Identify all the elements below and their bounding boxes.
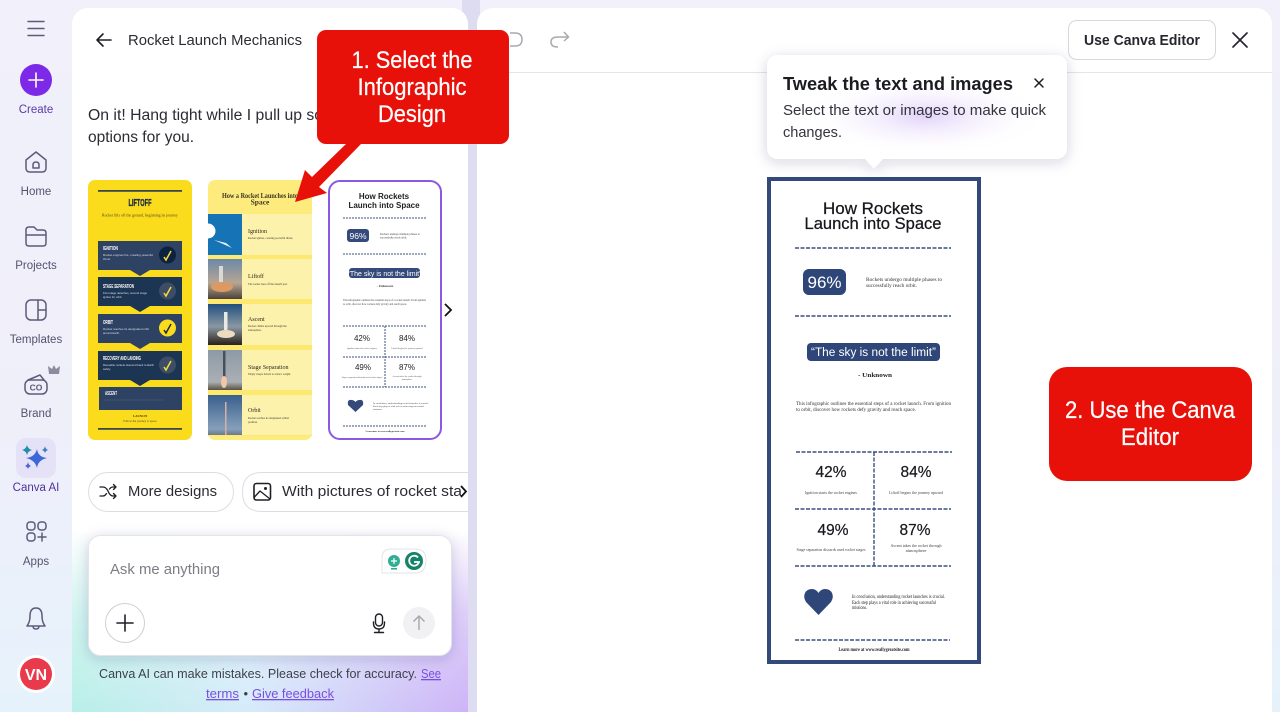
grammarly badge [382, 549, 426, 573]
quote: - Unknown [858, 372, 892, 379]
tooltip: tweak the text and images [767, 55, 1067, 168]
step: stage separation: ignites for orbit. [103, 295, 122, 299]
assistant message [88, 107, 345, 146]
design thumbnail: how rockets launch (selected): Stage separation discards used rocket stages [342, 376, 382, 379]
icon: redo [551, 32, 568, 47]
stat: 84%: Liftoff begins the journey upward [889, 490, 944, 495]
tooltip: tweak the text and images: Select the text or images to make quick [783, 103, 1047, 119]
step: recovery and landing: RECOVERY AND LANDING [103, 356, 141, 362]
callout: use the canva editor: 2. Use the Canva [1065, 397, 1236, 424]
stat: 87%: Ascent takes the rocket through [890, 543, 942, 548]
callout: select the infographic design: Infographic [358, 74, 466, 101]
chip: with pictures of rocket stages [242, 472, 468, 512]
stat: 49% [796, 522, 866, 552]
assistant message: On it! Hang tight while I pull up some [88, 107, 345, 124]
disclaimer text: terms [206, 686, 240, 701]
row: orbit: Rocket reaches its designated orbital [248, 417, 289, 420]
stat: 96%: Rockets undergo multiple phases to [866, 277, 942, 283]
row: liftoff [208, 259, 312, 299]
design thumbnail: how rockets launch (selected): atmosphere [402, 379, 412, 381]
nav item: home [21, 152, 51, 198]
stat: 42% [805, 464, 857, 495]
design thumbnail: how rockets launch (selected): Ignition starts the rocket engines [347, 347, 377, 350]
intro paragraph [796, 400, 951, 413]
design thumbnail: how rockets launch (selected): Rockets undergo multiple phases to [380, 233, 420, 236]
disclaimer text: See [421, 666, 441, 681]
step: stage separation: First stage detaches, second stage [103, 291, 147, 295]
design thumbnail: how rockets launch (selected): How Rockets [359, 192, 410, 201]
nav item: apps: Apps [23, 556, 49, 568]
stat: 87%: atmosphere [906, 548, 926, 553]
step: recovery and landing: safely. [103, 367, 111, 371]
chat input box: Ask me anything [110, 561, 220, 578]
step: stage separation: STAGE SEPARATION [103, 284, 134, 290]
stat: 42%: Ignition starts the rocket engines [805, 490, 857, 495]
conclusion text [852, 594, 945, 611]
icon: carousel next arrow [445, 304, 451, 316]
stat: 49%: 49% [818, 522, 848, 539]
design thumbnail: how rockets launch (selected): missions. [373, 408, 383, 411]
tooltip: tweak the text and images: changes. [783, 125, 842, 141]
quote: “The sky is not the limit” [811, 347, 936, 359]
icon: microphone [374, 614, 384, 632]
chat header: Rocket Launch Mechanics [128, 32, 302, 49]
row: ascent [208, 304, 312, 345]
design thumbnail: how rockets launch (selected): Each step plays a vital role in achieving successful [373, 405, 424, 408]
stat: 96%: 96% [807, 273, 842, 292]
stat: 87% [890, 522, 942, 553]
nav item: brand [21, 365, 60, 420]
row: ignition [200, 214, 312, 255]
row: ascent: atmosphere. [248, 329, 262, 332]
stat: 49%: Stage separation discards used rocket stages [796, 547, 866, 552]
icon: undo [510, 33, 522, 46]
stat: 87%: 87% [900, 522, 930, 539]
design thumbnail: liftoff [88, 180, 192, 440]
use canva editor button: Use Canva Editor [1084, 33, 1200, 49]
row: ascent: Rocket climbs upward through the [248, 325, 287, 328]
panel: design preview [477, 8, 1272, 712]
disclaimer text [99, 666, 441, 701]
icon: close [1233, 33, 1247, 47]
nav item: projects [15, 227, 57, 272]
stat: 84% [889, 464, 944, 495]
row: stage separation: Stage Separation [248, 365, 288, 371]
user avatar [17, 655, 55, 693]
conclusion text: Each step plays a vital role in achieving successful [852, 599, 936, 606]
quote [807, 343, 940, 379]
chip: with pictures of rocket stages: With pictures of rocket sta [282, 483, 463, 500]
tooltip: tweak the text and images: Tweak the text and images [783, 74, 1013, 94]
step: recovery and landing [98, 351, 182, 386]
design thumbnail: how rockets launch (selected): 87% [399, 363, 415, 372]
step: ascent: ASCENT [105, 391, 117, 397]
create button: Create [19, 104, 53, 116]
chip: more designs [88, 472, 234, 512]
row: liftoff: Liftoff [248, 273, 264, 280]
step: orbit [98, 314, 182, 349]
design thumbnail: liftoff: Follow the journey to space [123, 419, 157, 423]
row: orbit [208, 395, 312, 435]
step: ignition: IGNITION [103, 246, 118, 252]
design thumbnail: how rockets launch (selected): In conclusion, understanding rocket launches is crucial. [373, 402, 429, 405]
row: ignition: Ignition [248, 229, 267, 235]
row: orbit: Orbit [248, 408, 261, 414]
footer link: Learn more at www.reallygreatsite.com [838, 648, 910, 653]
step: orbit: around Earth. [103, 331, 120, 335]
icon: menu [28, 22, 44, 36]
use canva editor button [1068, 20, 1216, 60]
callout arrow [295, 144, 361, 202]
design thumbnail: how rockets launch (selected): 42% [354, 334, 370, 343]
icon: heart [804, 589, 833, 615]
callout: use the canva editor: Editor [1121, 424, 1179, 451]
stat: 96%: successfully reach orbit. [866, 282, 918, 289]
design thumbnail: liftoff: LAUNCH [133, 414, 147, 418]
conclusion text: missions. [852, 605, 867, 611]
add attachment button [106, 604, 144, 642]
disclaimer text: Give feedback [252, 686, 334, 701]
conclusion text: In conclusion, understanding rocket launches is crucial. [852, 594, 945, 600]
panel: canva ai chat [72, 8, 468, 712]
design thumbnail: how rockets launch (selected): “The sky is not the limit” [348, 271, 422, 278]
intro paragraph: to orbit, discover how rockets defy gravity and reach space. [796, 406, 917, 413]
row: ignition: Rocket ignites, creating powerful thrust. [248, 237, 293, 240]
design thumbnail: how rockets launch (selected): Launch into Space [348, 201, 420, 210]
stat: 96% [803, 269, 942, 295]
callout: select the infographic design [317, 30, 509, 144]
assistant message: options for you. [88, 129, 194, 146]
chat input box [88, 536, 452, 656]
user avatar: VN [25, 667, 47, 684]
design thumbnail: how rockets launch (selected): 84% [399, 334, 415, 343]
design thumbnail: how a rocket launches [200, 180, 312, 440]
callout: select the infographic design: 1. Select the [352, 47, 472, 74]
design thumbnail: how rockets launch (selected) [329, 181, 441, 439]
design thumbnail: liftoff: Rocket lifts off the ground, beginning its journey [102, 214, 178, 218]
design thumbnail: how rockets launch (selected): This infographic outlines the essential steps of a rocket launch. From ignition [343, 299, 427, 302]
nav item: canva ai: Canva AI [13, 482, 59, 494]
sidebar navigation [10, 22, 62, 693]
nav item: home: Home [21, 186, 51, 198]
row: ascent: Ascent [248, 317, 265, 323]
row: orbit: position. [248, 421, 258, 424]
step: orbit: Rocket reaches its designated orbit [103, 327, 149, 331]
row: stage separation [208, 350, 312, 390]
intro paragraph: This infographic outlines the essential steps of a rocket launch. From ignition [796, 400, 951, 407]
design thumbnail: how rockets launch (selected): Liftoff begins the journey upward [391, 347, 423, 350]
step: ignition: Rocket engines fire, creating powerful [103, 253, 153, 257]
infographic title: Launch into Space [804, 215, 942, 233]
icon: notifications bell [27, 608, 45, 629]
step: orbit: ORBIT [103, 320, 113, 326]
design thumbnail: how a rocket launches: How a Rocket Launches into [222, 191, 298, 200]
stat: 42%: 42% [816, 464, 846, 481]
nav item: brand: CO [30, 382, 43, 392]
icon: tooltip close [1035, 79, 1043, 87]
design thumbnail: how rockets launch (selected): 49% [355, 363, 371, 372]
step: stage separation [98, 277, 182, 312]
design thumbnail: how rockets launch (selected): 96% [349, 231, 367, 241]
nav item: brand: Brand [21, 408, 51, 420]
callout: select the infographic design: Design [378, 101, 446, 128]
design thumbnail: how rockets launch (selected): - Unknown [377, 284, 393, 288]
create button [19, 64, 53, 116]
send button [403, 607, 435, 639]
stat: 84%: 84% [900, 464, 932, 481]
design thumbnail: how a rocket launches: Space [251, 198, 270, 206]
step: ignition: thrust. [103, 257, 111, 261]
step: recovery and landing: Reusable rockets descend back to Earth [103, 363, 154, 367]
design thumbnail: liftoff: LIFTOFF [128, 198, 152, 209]
callout: use the canva editor [1049, 367, 1252, 481]
row: liftoff: The rocket rises off the launch pad. [248, 283, 288, 286]
infographic title [804, 200, 942, 233]
row: stage separation: Empty stages detach to reduce weight. [248, 373, 291, 376]
nav item: canva ai [13, 438, 59, 494]
chip: more designs: More designs [128, 483, 217, 500]
nav item: templates: Templates [10, 334, 62, 346]
design thumbnail: how rockets launch (selected): to orbit, discover how rockets defy gravity and reach space. [343, 303, 407, 306]
nav item: templates [10, 300, 62, 346]
infographic preview [769, 179, 979, 662]
nav item: projects: Projects [15, 260, 57, 272]
design thumbnail: how rockets launch (selected): successfully reach orbit. [380, 236, 407, 240]
nav item: apps [23, 522, 49, 568]
step: ascent [99, 387, 182, 410]
design thumbnail: how rockets launch (selected): Ascent takes the rocket through [392, 375, 422, 378]
infographic title: How Rockets [823, 200, 923, 218]
design thumbnail: how rockets launch (selected): Learn more at www.reallygreatsite.com [366, 430, 404, 433]
disclaimer text: • [244, 686, 248, 701]
disclaimer text: Canva AI can make mistakes. Please check for accuracy. [99, 666, 417, 681]
step: ignition [98, 241, 182, 276]
